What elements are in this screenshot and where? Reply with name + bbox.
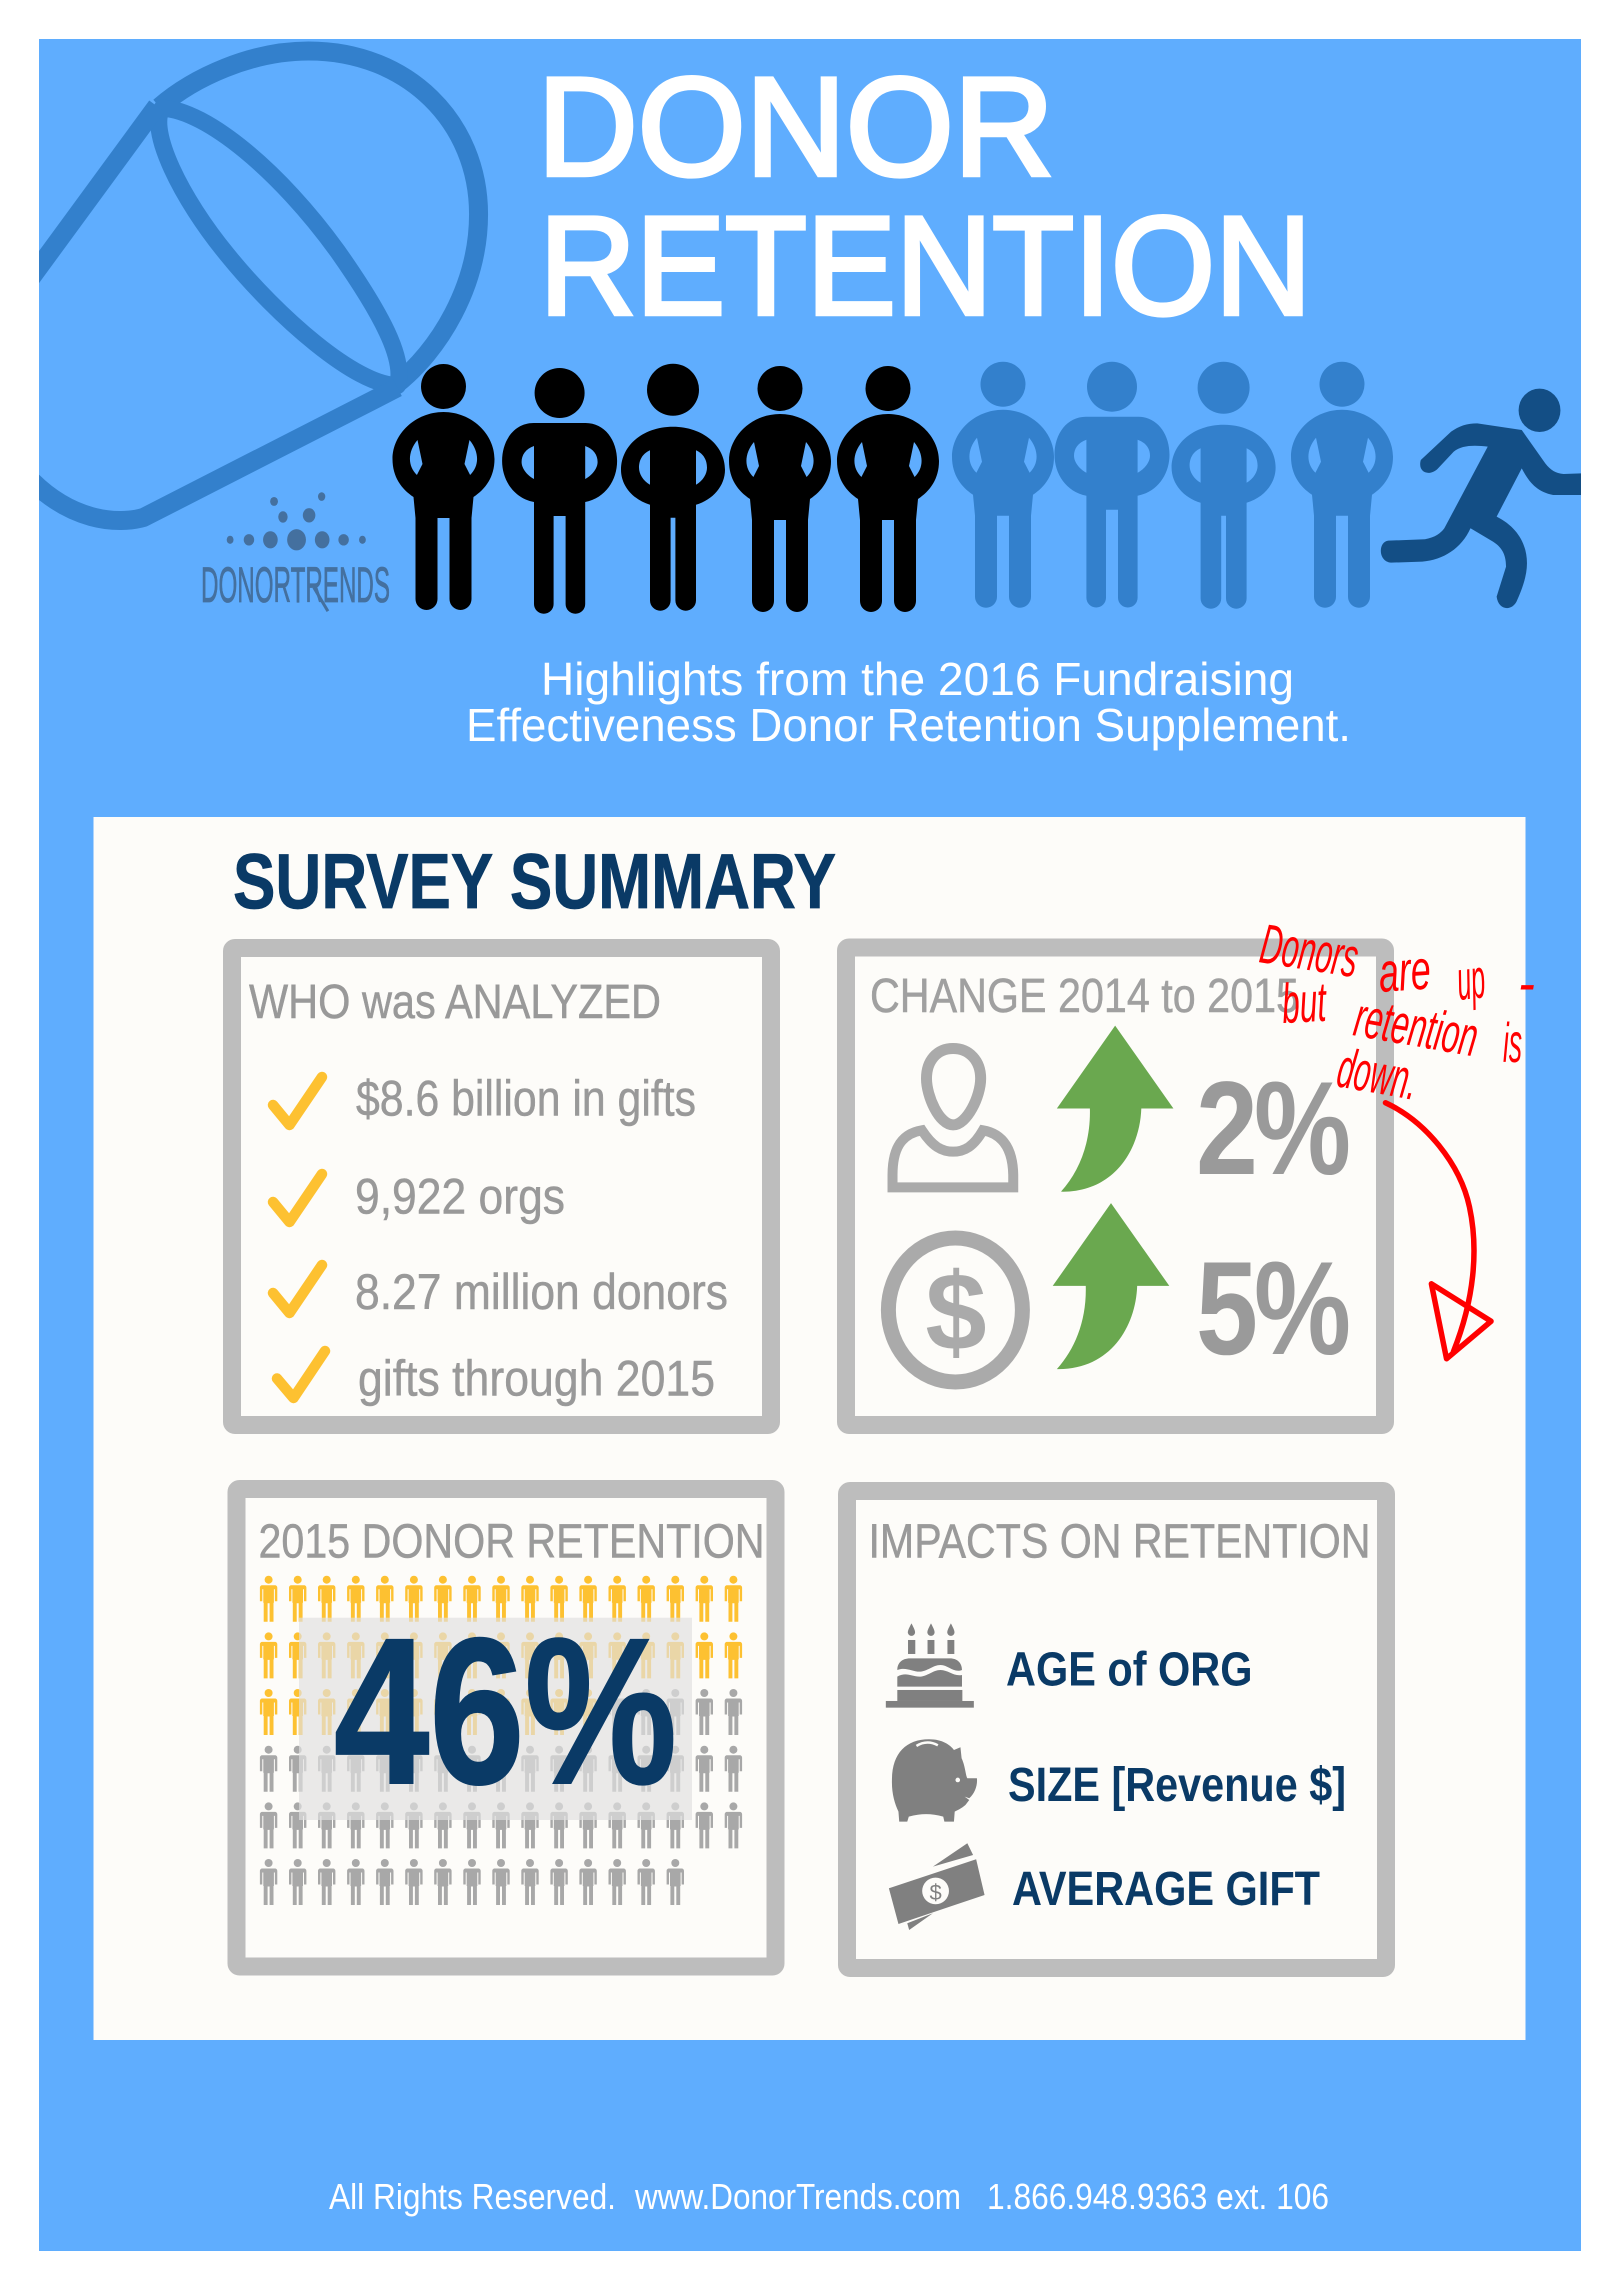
stat: 46%: 46% (334, 1596, 677, 1828)
subtitle: Effectiveness Donor Retention Supplement. (466, 699, 1351, 751)
stat: dollars up 5%: 5 (1196, 1235, 1258, 1383)
icon: retained donor 2 (502, 368, 617, 614)
icon: green arrow up, donors (1057, 1026, 1173, 1192)
stat: donors up 2%: % (1254, 1055, 1351, 1203)
pictogram: 100 donors, 46 highlighted (260, 1576, 742, 1905)
arrow: red hand-drawn (1385, 1103, 1491, 1359)
icon: donor (893, 1049, 1013, 1187)
checklist: 9,922 orgs (355, 1168, 565, 1224)
logo: DonorTrends (201, 492, 390, 613)
icon: bucket (21, 51, 479, 521)
icon: fading donor 3 (1172, 362, 1276, 609)
icon: retained donor 1 (392, 364, 494, 610)
title: DONOR (538, 48, 1054, 205)
label: average gift: AVERAGE GIFT (1012, 1863, 1320, 1916)
footer: www.DonorTrends.com (634, 2176, 961, 2217)
handwritten annotation: down. (1333, 1036, 1423, 1112)
icon: retained donor 5 (837, 366, 939, 612)
icon: dollar coin (888, 1238, 1022, 1382)
handwritten annotation (1256, 912, 1535, 1112)
icon: dollar coin: $ (925, 1251, 987, 1374)
panel: 2015 donor retention (236, 1489, 776, 1966)
panel: 2015 donor retention: 2015 DONOR RETENTION (258, 1516, 764, 1568)
handwritten annotation: is (1503, 1011, 1522, 1074)
label: age of org: AGE of ORG (1006, 1644, 1252, 1696)
footer: 1.866.948.9363 ext. 106 (987, 2176, 1329, 2217)
icon: fading donor 4 (1291, 362, 1393, 608)
handwritten annotation: up (1454, 946, 1488, 1012)
handwritten annotation: but (1280, 970, 1329, 1035)
icon: green arrow up, dollars (1053, 1203, 1169, 1369)
panel: change 2014 to 2015 (846, 948, 1385, 1425)
handwritten annotation: Donors (1256, 912, 1363, 989)
panel: who was analyzed: WHO was ANALYZED (249, 976, 661, 1029)
handwritten annotation: retention (1350, 985, 1483, 1068)
handwritten annotation: are (1376, 937, 1433, 1004)
title (538, 48, 1312, 344)
icon: money: $ (929, 1880, 942, 1905)
icon: fading donor 1 (952, 362, 1054, 608)
icon: retained donor 3 (621, 364, 725, 611)
panel: change 2014 to 2015: CHANGE 2014 to 2015 (870, 970, 1299, 1023)
title: RETENTION (540, 187, 1312, 344)
header illustration clipped to poster (39, 42, 1581, 1866)
label: size: SIZE [Revenue $] (1008, 1759, 1346, 1812)
subtitle: Highlights from the 2016 Fundraising (541, 653, 1294, 705)
footer: All Rights Reserved. (329, 2176, 616, 2217)
checklist: $8.6 billion in gifts (356, 1070, 696, 1126)
icon: retained donor 4 (729, 366, 831, 612)
stat: dollars up 5%: % (1254, 1235, 1351, 1383)
stat: donors up 2%: 2 (1196, 1055, 1258, 1203)
icon: piggy bank (892, 1739, 977, 1822)
checklist: 8.27 million donors (355, 1264, 728, 1320)
subtitle (466, 653, 1351, 751)
panel: impacts on retention: IMPACTS ON RETENTION (868, 1516, 1370, 1568)
highlight band (299, 1618, 692, 1820)
heading: survey summary: SURVEY SUMMARY (233, 837, 836, 925)
icon: money (889, 1843, 985, 1930)
icon: running person (1381, 389, 1584, 608)
stat: dollars up 5% (1196, 1235, 1351, 1383)
text: DONORTRENDS (201, 557, 390, 613)
panel: survey summary (94, 817, 1526, 2040)
checklist (273, 1070, 728, 1406)
stat: donors up 2% (1196, 1055, 1351, 1203)
checklist: gifts through 2015 (358, 1350, 715, 1406)
people row (392, 362, 1393, 614)
panel: impacts on retention (847, 1491, 1386, 1968)
footer (329, 2176, 1329, 2217)
icon: fading donor 2 (1054, 362, 1170, 608)
icon: birthday cake (886, 1623, 974, 1708)
handwritten annotation: - (1518, 951, 1535, 1014)
panel: who was analyzed (232, 948, 771, 1425)
